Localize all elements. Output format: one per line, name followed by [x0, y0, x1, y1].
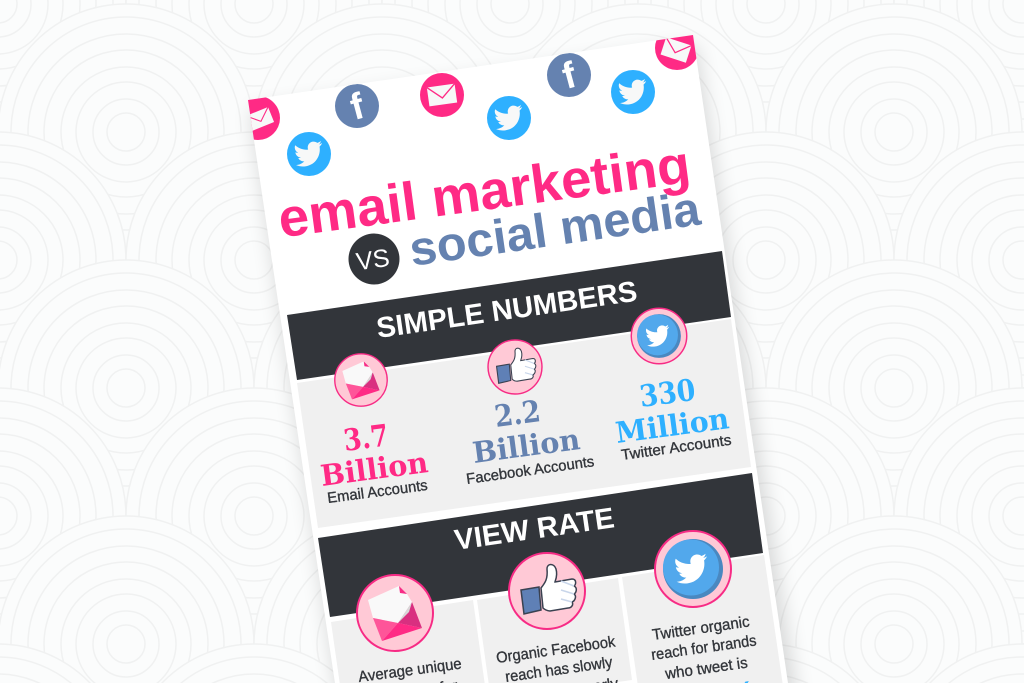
title: vs badge: VS [354, 244, 391, 276]
heading: view rate: VIEW RATE [452, 502, 616, 557]
panel: facebook view rate [477, 553, 632, 683]
number unit: billion: Billion [318, 445, 430, 493]
stat: email accounts [318, 354, 430, 507]
card shadow [251, 45, 797, 683]
heading: simple numbers: SIMPLE NUMBERS [374, 276, 639, 345]
icon: twitter 1 [287, 132, 331, 176]
text: twitter view rate: Twitter organic [651, 613, 751, 644]
text: facebook view rate [495, 633, 620, 683]
title: email marketing: email marketing [275, 134, 694, 249]
icon: envelope badge [335, 354, 387, 406]
section band: simple numbers [287, 251, 731, 380]
icon: email 1 [420, 73, 464, 117]
title: social media: social media [406, 183, 704, 277]
icon: twitter 2 [487, 96, 531, 140]
icon: thumb badge [488, 340, 542, 394]
icon: twitter badge large [655, 531, 731, 607]
stat: facebook accounts [465, 340, 595, 488]
icon: facebook 2 [547, 53, 591, 97]
panel: email view rate [331, 575, 487, 683]
icon: facebook 1 [335, 84, 379, 128]
number unit: million: Million [613, 401, 731, 450]
panel: twitter view rate [622, 531, 785, 683]
panel: view rate columns [331, 531, 785, 683]
number unit: billion: Billion [470, 422, 582, 470]
text: twitter view rate [650, 613, 758, 683]
text: twitter view rate: reach for brands [650, 632, 758, 664]
panel: simple numbers [297, 308, 751, 528]
text: facebook view rate: Organic Facebook [495, 633, 617, 667]
number: 330: 330 [637, 373, 698, 415]
icon: twitter 3 [611, 70, 655, 114]
text: twitter view rate: who tweet is [663, 655, 749, 683]
social icon row [236, 26, 699, 176]
stat: twitter accounts [613, 308, 732, 464]
number: 3.7: 3.7 [341, 418, 391, 459]
caption: twitter accounts: Twitter Accounts [620, 432, 732, 464]
caption: email accounts: Email Accounts [326, 477, 429, 507]
infographic card [236, 26, 789, 683]
icon: email corner right [655, 35, 696, 70]
icon: email corner left [248, 98, 280, 140]
icon: envelope badge large [357, 575, 433, 651]
icon: thumb badge large [509, 553, 585, 629]
caption: facebook accounts: Facebook Accounts [465, 453, 595, 488]
icon: twitter badge [631, 308, 687, 364]
section band: view rate [318, 473, 763, 617]
title: vs badge [348, 234, 400, 284]
number: 2.2: 2.2 [492, 394, 543, 435]
